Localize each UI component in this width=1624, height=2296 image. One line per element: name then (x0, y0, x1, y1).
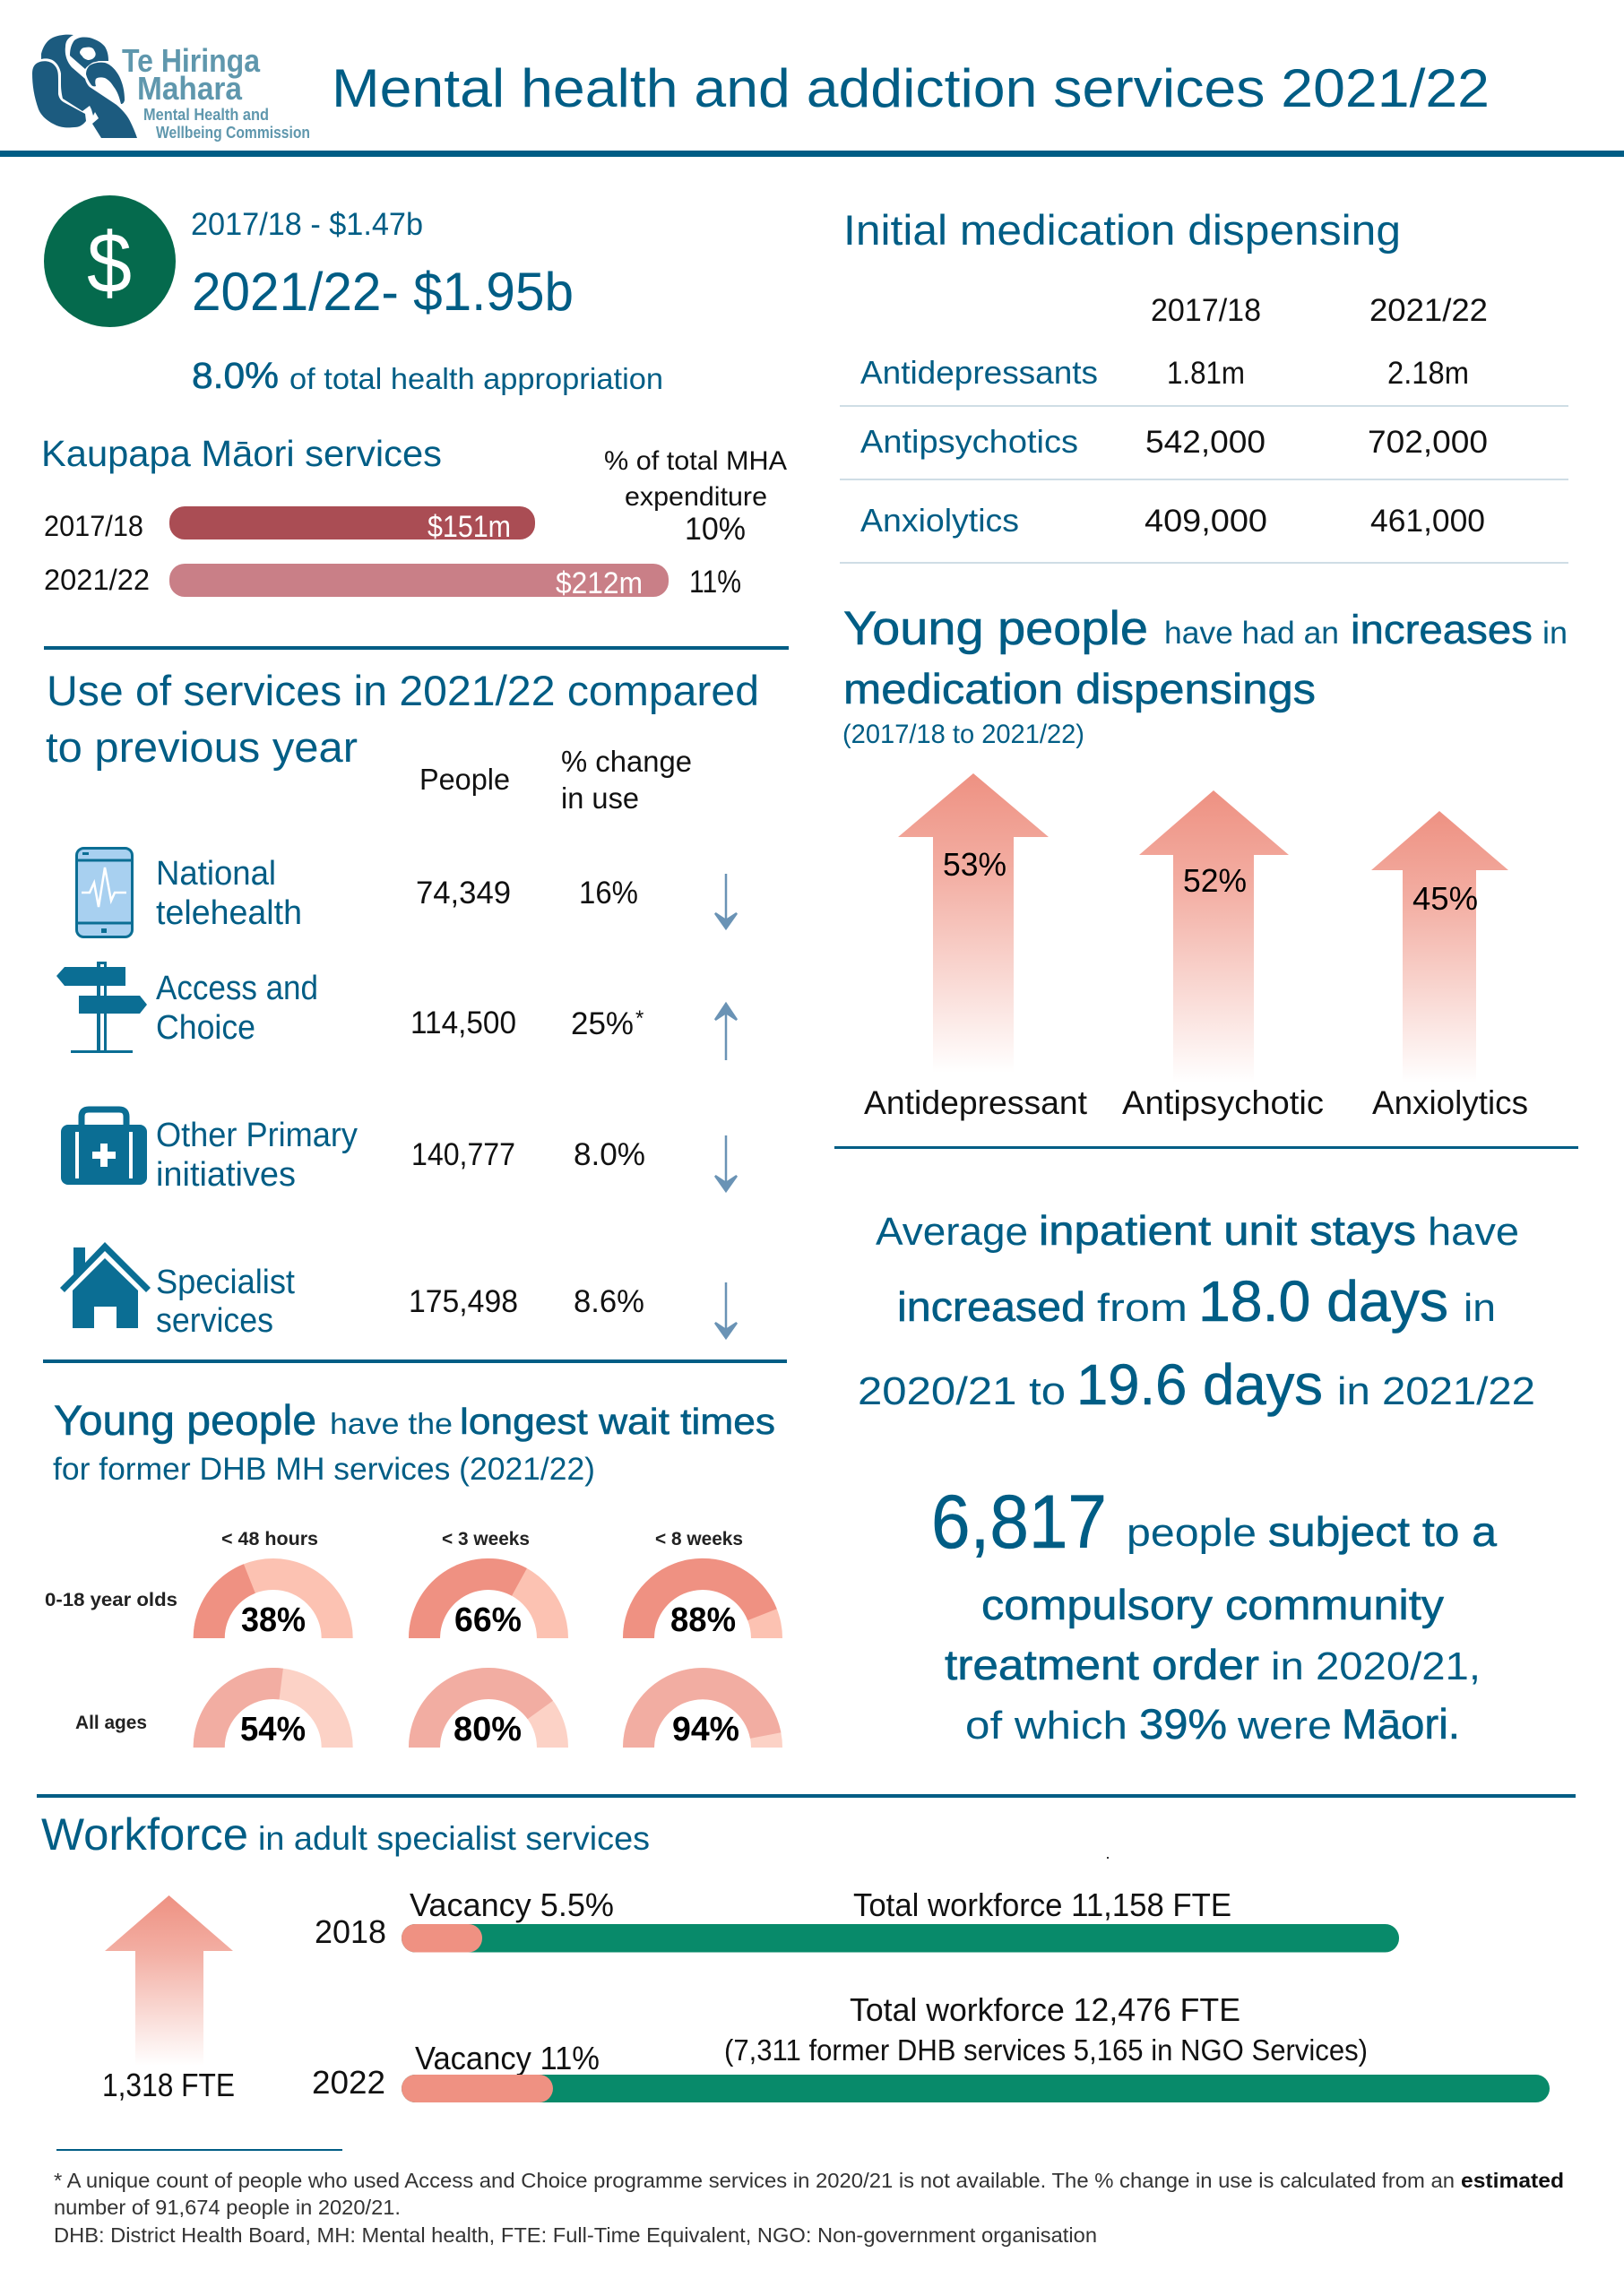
arrow: anxiolytics 45%: 45% (1412, 880, 1478, 917)
heading: (2017/18 to 2021/22) (842, 720, 1084, 749)
row: Anxiolytics: 461,000 (1370, 504, 1485, 539)
row label: all ages: All ages (75, 1713, 147, 1733)
gauge: all ages under 8 weeks 94% (623, 1668, 782, 1748)
heading (41, 1809, 650, 1860)
bar 2021/22: $212m (556, 566, 643, 600)
row: National telehealth: 16% (579, 876, 638, 911)
row: Specialist services: Specialist (156, 1264, 295, 1301)
logo (32, 35, 310, 142)
row: National telehealth: telehealth (156, 894, 302, 932)
column heading: expenditure (625, 482, 767, 512)
gauge: 0-18 under 48 hours 38%: 38% (241, 1601, 306, 1639)
table header: 2017/18 (1151, 293, 1261, 328)
arrow: up (715, 1004, 737, 1060)
workforce bar 2022 (312, 1991, 1550, 2102)
gauge: all ages under 48 hours 54%: 54% (240, 1711, 306, 1748)
row: Antipsychotics (860, 423, 1488, 460)
heading: Use of services in 2021/22 compared (47, 667, 759, 714)
panel: young people medication (842, 602, 1568, 1121)
column labels (221, 1529, 743, 1549)
callout: compulsory treatment order: 6,817 (931, 1480, 1107, 1564)
arrow: anxiolytics 45%: Anxiolytics (1372, 1084, 1528, 1121)
callout: inpatient unit stays: 18.0 days (1198, 1269, 1448, 1334)
footnotes: estimated (1461, 2169, 1564, 2192)
heading: to previous year (46, 723, 358, 771)
heading: longest wait times (460, 1401, 775, 1442)
callout: inpatient unit stays: Average (876, 1210, 1028, 1254)
callout: inpatient unit stays: from (1097, 1286, 1188, 1330)
callout: compulsory treatment order: were (1237, 1704, 1332, 1748)
callout: compulsory treatment order: of which (965, 1704, 1127, 1748)
bar 2017/18 (44, 506, 746, 547)
workforce bar 2022: Total workforce 12,476 FTE (850, 1991, 1240, 2028)
logo text: Te Hiringa (122, 42, 261, 79)
row: National telehealth: 74,349 (416, 876, 511, 911)
heading: for former DHB MH services (2021/22) (53, 1452, 595, 1487)
gauge: 0-18 under 8 weeks 88% (623, 1558, 782, 1639)
row: Other Primary initiatives: 8.0% (574, 1137, 645, 1172)
row: Access and Choice: * (635, 1006, 644, 1031)
workforce bar 2018: Total workforce 11,158 FTE (853, 1886, 1231, 1923)
gauge: all ages under 3 weeks 80% (409, 1668, 568, 1748)
heading: have the (330, 1407, 453, 1440)
callout: inpatient unit stays: 19.6 days (1076, 1352, 1323, 1417)
heading: Young people (54, 1396, 316, 1444)
column headings: % change (561, 745, 692, 778)
row: Other Primary initiatives: Other Primary (156, 1117, 358, 1154)
row: Specialist services: 8.6% (574, 1284, 644, 1319)
footnotes: * A unique count of people who used Access and Choice programme services in 2020/21 is not available. The % change in use is calculated from an (54, 2169, 1455, 2192)
callout: inpatient unit stays: in (1464, 1286, 1496, 1330)
bar 2021/22 (44, 564, 741, 600)
heading: Initial medication dispensing (843, 206, 1401, 254)
funding 2017/18: 2017/18 - $1.47b (191, 207, 423, 242)
icon: phone (76, 848, 133, 937)
panel: use of services (46, 667, 759, 1340)
gauge: all ages under 3 weeks 80%: 80% (454, 1711, 522, 1748)
gauge: 0-18 under 3 weeks 66% (409, 1558, 568, 1639)
workforce bar 2018: 2018 (315, 1913, 386, 1950)
gauge: 0-18 under 48 hours 38% (194, 1558, 353, 1639)
share of health appropriation (192, 355, 663, 396)
share of health appropriation: 8.0% (192, 355, 279, 396)
row: Antipsychotics: 702,000 (1368, 425, 1488, 460)
row: Antidepressants: Antidepressants (860, 354, 1098, 391)
row: Specialist services: services (156, 1302, 273, 1340)
column heading: % of total MHA (604, 446, 787, 476)
icon: dollar circle: $ (87, 215, 132, 311)
row: Specialist services (60, 1242, 737, 1340)
footnotes (54, 2169, 1564, 2247)
arrow: antidepressant 53% (864, 773, 1088, 1121)
icon: dollar circle (44, 195, 176, 327)
row: Anxiolytics: Anxiolytics (860, 502, 1019, 539)
share of health appropriation: of total health appropriation (289, 362, 663, 395)
table header: 2021/22 (1369, 293, 1488, 328)
bar 2017/18: $151m (428, 510, 511, 544)
row: Access and Choice: 25% (571, 1006, 634, 1041)
row: Other Primary initiatives: initiatives (156, 1156, 296, 1194)
logo text (122, 42, 310, 142)
icon: signpost (56, 962, 147, 1053)
row: Other Primary initiatives: 140,777 (411, 1137, 515, 1172)
row: Antidepressants: 1.81m (1167, 356, 1245, 391)
workforce bar 2022: 2022 (312, 2064, 385, 2101)
panel: funding (44, 195, 663, 396)
column headings (419, 745, 692, 815)
panel: wait times (45, 1396, 782, 1748)
callout: inpatient unit stays: inpatient unit stays (1039, 1207, 1416, 1254)
column labels: < 48 hours (221, 1529, 318, 1549)
callout: compulsory treatment order: subject to a (1268, 1508, 1497, 1555)
callout: compulsory treatment order: compulsory community (981, 1581, 1445, 1628)
heading: in (1542, 616, 1568, 651)
callout: compulsory treatment order: in 2020/21, (1271, 1644, 1481, 1688)
header (32, 35, 1490, 142)
arrow: antipsychotic 52%: 52% (1183, 862, 1247, 899)
bar 2021/22: 11% (689, 565, 741, 600)
column heading (604, 446, 787, 512)
row: National telehealth (76, 848, 737, 937)
callout: compulsory treatment order (931, 1480, 1497, 1748)
row: Access and Choice: 114,500 (410, 1006, 516, 1040)
heading (842, 602, 1568, 749)
row: Specialist services: 175,498 (409, 1284, 518, 1319)
arrow: 1,318 FTE (102, 1895, 235, 2103)
workforce bar 2018: Vacancy 5.5% (410, 1886, 614, 1923)
table header (1151, 293, 1488, 328)
callout: compulsory treatment order: 39% (1139, 1700, 1227, 1748)
callout: inpatient unit stays (858, 1207, 1535, 1417)
row: Access and Choice: Access and (156, 970, 318, 1007)
heading: Workforce (41, 1809, 248, 1860)
heading: medication dispensings (843, 665, 1316, 712)
callout: inpatient unit stays: increased (897, 1283, 1085, 1330)
callout: compulsory treatment order: people (1127, 1511, 1257, 1555)
arrow: 1,318 FTE: 1,318 FTE (102, 2067, 235, 2103)
row: Access and Choice: Choice (156, 1009, 255, 1047)
gauge: 0-18 under 8 weeks 88%: 88% (670, 1601, 736, 1639)
gauge: all ages under 48 hours 54% (194, 1668, 353, 1748)
callout: inpatient unit stays: in 2021/22 (1337, 1369, 1535, 1413)
row: Antipsychotics: 542,000 (1145, 425, 1266, 460)
icon: house (60, 1242, 151, 1328)
bar 2017/18: 2017/18 (44, 510, 143, 542)
workforce bar 2022: (7,311 former DHB services 5,165 in NGO Services) (724, 2033, 1368, 2067)
heading: Kaupapa Māori services (41, 433, 442, 474)
heading: in adult specialist services (258, 1820, 650, 1857)
callout: inpatient unit stays: 2020/21 to (858, 1369, 1066, 1413)
title: Mental health and addiction services 2021/22 (332, 58, 1490, 118)
heading (46, 667, 759, 771)
icon: medical bag (61, 1109, 147, 1185)
heading: increases (1351, 607, 1533, 652)
row: Access and Choice (56, 962, 737, 1060)
column headings: in use (561, 781, 639, 815)
row: Other Primary initiatives (61, 1109, 737, 1194)
heading (53, 1396, 775, 1487)
panel: workforce (41, 1809, 1550, 2103)
arrow: down (715, 1282, 737, 1338)
row: National telehealth: National (156, 855, 276, 893)
bar 2017/18: 10% (685, 512, 746, 547)
arrow: anxiolytics 45% (1371, 811, 1528, 1121)
footnotes: DHB: District Health Board, MH: Mental health, FTE: Full-Time Equivalent, NGO: Non-government organisation (54, 2223, 1097, 2247)
arrow: antidepressant 53%: 53% (943, 846, 1006, 883)
callout: inpatient unit stays: have (1428, 1210, 1519, 1254)
footnotes: number of 91,674 people in 2020/21. (54, 2196, 401, 2219)
gauge: all ages under 8 weeks 94%: 94% (672, 1711, 739, 1748)
workforce bar 2022: Vacancy 11% (415, 2040, 600, 2076)
row: Anxiolytics: 409,000 (1145, 504, 1267, 539)
column labels: < 3 weeks (442, 1529, 530, 1549)
funding 2021/22: 2021/22- $1.95b (192, 262, 574, 322)
arrow: down (715, 1135, 737, 1191)
row: Anxiolytics (860, 502, 1485, 539)
logo mark (32, 35, 137, 138)
row label: 0-18 year olds: 0-18 year olds (45, 1590, 177, 1610)
arrow: antipsychotic 52%: Antipsychotic (1122, 1084, 1324, 1121)
panel: initial medication dispensing (840, 206, 1568, 563)
row: Antidepressants (860, 354, 1469, 391)
arrow: antipsychotic 52% (1122, 790, 1324, 1121)
panel: Kaupapa Māori services (41, 433, 787, 600)
heading: Young people (843, 602, 1148, 655)
row: Antidepressants: 2.18m (1387, 356, 1469, 391)
logo text: Mahara (137, 70, 243, 107)
row: Antipsychotics: Antipsychotics (860, 423, 1078, 460)
arrow: antidepressant 53%: Antidepressant (864, 1084, 1088, 1121)
workforce bar 2018 (315, 1886, 1399, 1952)
callout: compulsory treatment order: treatment order (945, 1641, 1259, 1688)
arrow: down (715, 874, 737, 928)
column headings: People (419, 763, 510, 796)
callout: compulsory treatment order: Māori. (1342, 1700, 1460, 1748)
logo text: Wellbeing Commission (156, 124, 310, 142)
gauge: 0-18 under 3 weeks 66%: 66% (454, 1601, 522, 1639)
heading: have had an (1164, 616, 1339, 651)
bar 2021/22: 2021/22 (44, 564, 150, 596)
column labels: < 8 weeks (655, 1529, 743, 1549)
logo text: Mental Health and (143, 106, 269, 124)
